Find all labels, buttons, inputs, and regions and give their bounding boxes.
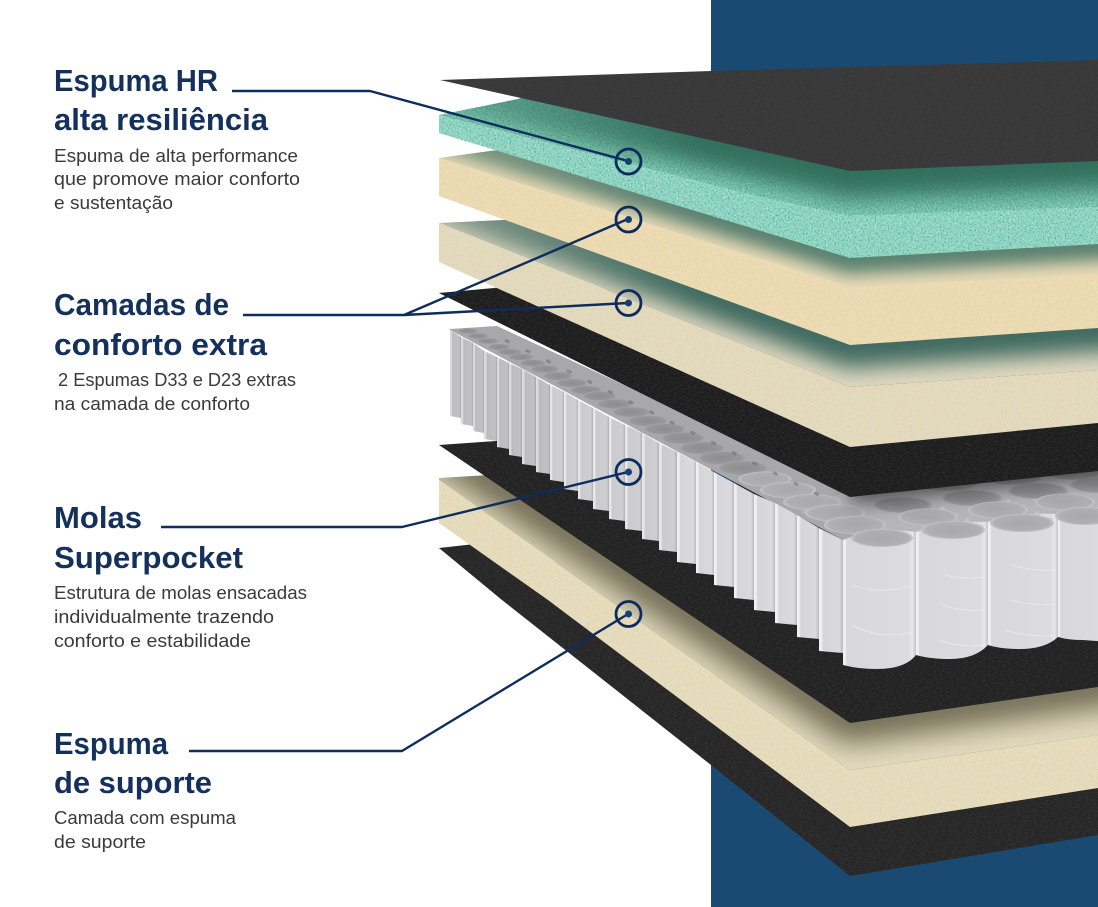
heading: conforto extra (54, 327, 268, 362)
heading: Molas (54, 500, 142, 535)
heading: Espuma HR (54, 63, 218, 98)
callout: Espuma de suporte (54, 602, 641, 852)
description: 2 Espumas D33 e D23 extras (58, 370, 296, 390)
description: Camada com espuma (54, 808, 237, 828)
layer: upper dark sheet (439, 283, 1098, 497)
layer: comfort foam lower (439, 220, 1098, 447)
description (54, 370, 296, 414)
callout: Camadas de conforto extra (54, 207, 641, 414)
heading (54, 500, 243, 575)
description: individualmente trazendo (54, 607, 274, 627)
spring stitching lines (852, 565, 1055, 646)
description: e sustentação (54, 193, 173, 213)
layer: HR green foam (439, 98, 1098, 258)
description: que promove maior conforto (54, 169, 300, 189)
spring tops (458, 328, 1098, 547)
background blue panel (711, 0, 1098, 907)
heading: Camadas de (54, 287, 229, 322)
layer: lower dark sheet (439, 438, 1098, 723)
heading (54, 287, 268, 362)
heading: alta resiliência (54, 102, 269, 137)
description (54, 583, 307, 651)
heading: Superpocket (54, 540, 243, 575)
layer: support foam (439, 475, 1098, 827)
heading (54, 63, 269, 137)
layer: comfort foam upper (439, 146, 1098, 345)
mattress layers illustration (439, 60, 1098, 876)
description (54, 808, 237, 852)
leader line and marker (161, 460, 641, 527)
spring front cylinders (843, 508, 1098, 669)
spring clip marks (505, 340, 835, 503)
description: Estrutura de molas ensacadas (54, 583, 307, 603)
spring side columns (450, 330, 843, 653)
spring top surface (450, 326, 1098, 545)
shadow on springs (850, 440, 1098, 490)
layer: bottom dark sheet (439, 541, 1098, 876)
leader lines and markers (243, 207, 641, 316)
layer: pocket springs (450, 326, 1098, 669)
description: Espuma de alta performance (54, 146, 298, 166)
leader line and marker (189, 602, 641, 751)
heading (54, 726, 212, 800)
callout: Molas Superpocket (54, 460, 641, 651)
layer: top dark sheet (440, 60, 1098, 171)
heading: de suporte (54, 765, 212, 800)
description: na camada de conforto (54, 394, 250, 414)
description: de suporte (54, 832, 146, 852)
heading: Espuma (54, 726, 169, 761)
description (54, 146, 300, 213)
description: conforto e estabilidade (54, 631, 251, 651)
callout: Espuma HR (54, 63, 641, 213)
leader line and marker (232, 91, 641, 174)
